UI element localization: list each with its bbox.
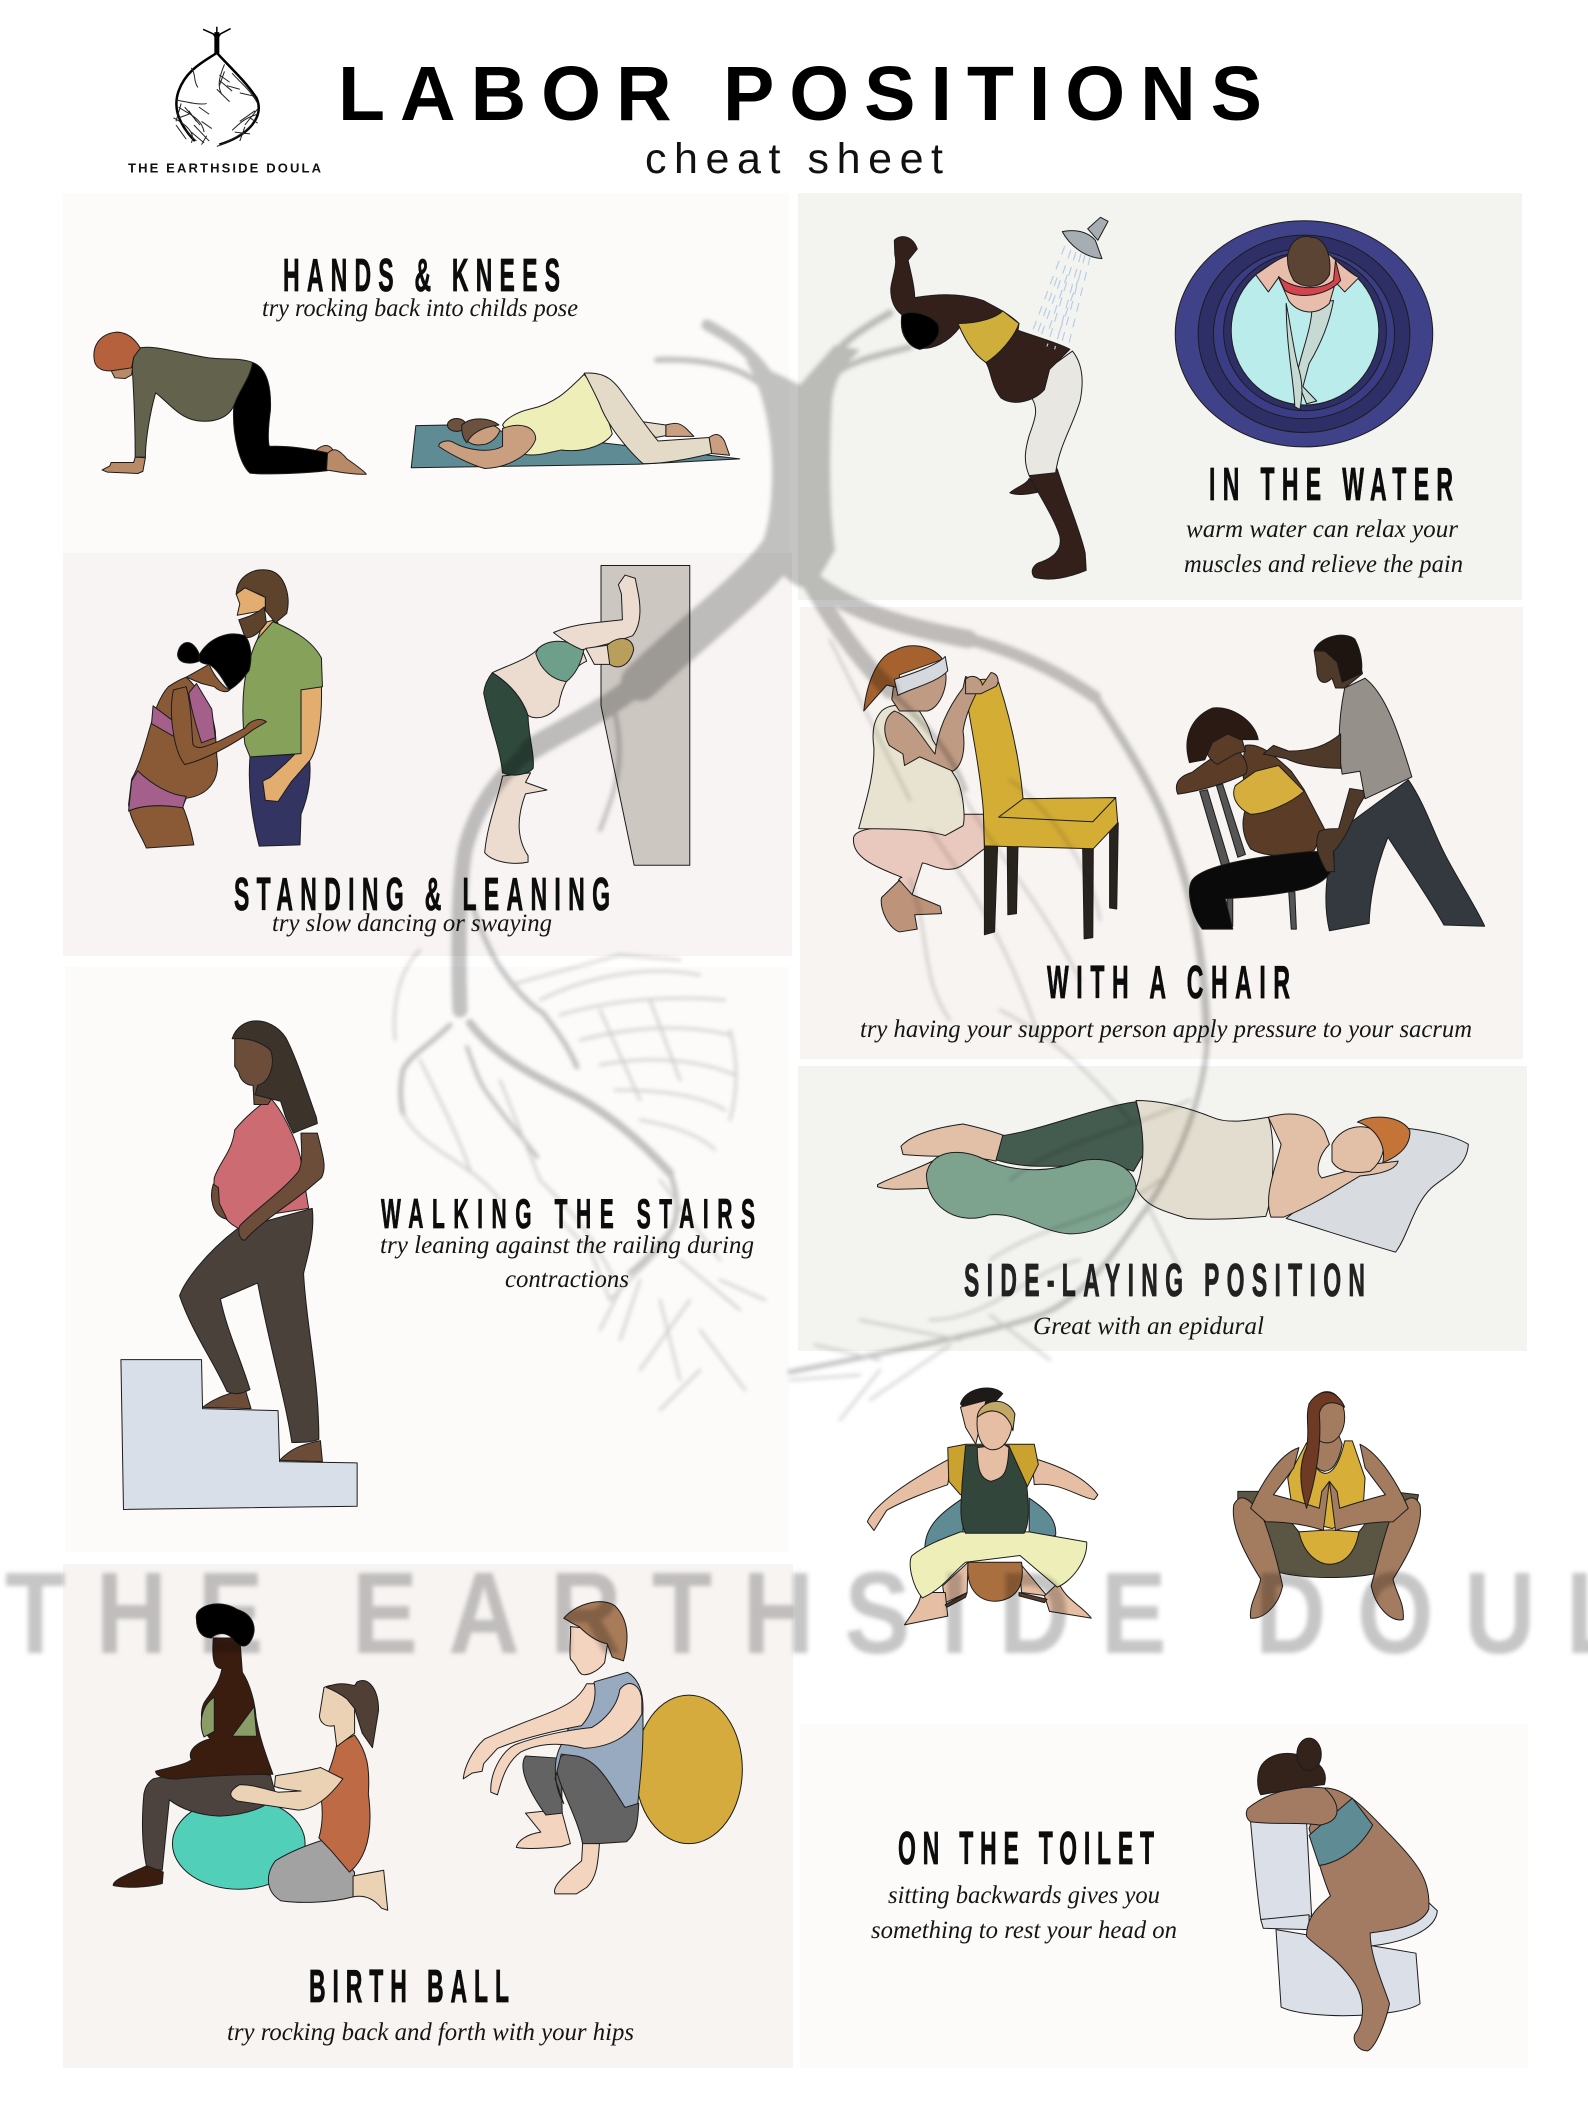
figure: woman on stairs	[121, 1021, 357, 1509]
figure: woman squatting against yellow ball	[463, 1602, 742, 1894]
tip text: Great with an epidural	[1033, 1313, 1264, 1340]
panel background	[63, 193, 789, 553]
heading: WALKING THE STAIRS	[381, 1191, 755, 1238]
figure: squatting woman with palms together	[1233, 1392, 1420, 1620]
figures: squatting positions	[867, 1388, 1420, 1625]
figure: woman under shower	[891, 217, 1108, 579]
heading: ON THE TOILET	[898, 1822, 1154, 1874]
figure: woman sitting backwards on toilet	[1246, 1738, 1437, 2051]
tip text line 2: muscles and relieve the pain	[1184, 551, 1463, 578]
panel background	[800, 1724, 1528, 2068]
tip text line 1: sitting backwards gives you	[888, 1882, 1160, 1909]
panel background	[798, 193, 1522, 600]
panel: hands and knees	[63, 193, 789, 553]
panel background	[63, 553, 792, 956]
panel: on the toilet	[800, 1724, 1528, 2068]
panel background	[65, 967, 789, 1552]
tip text: try having your support person apply pressure to your sacrum	[860, 1016, 1472, 1043]
figure: couple leaning	[129, 570, 322, 848]
tip text line 2: contractions	[505, 1266, 629, 1293]
figure: woman seated on chair with support person	[1176, 635, 1485, 931]
figure: supported squat couple	[867, 1388, 1098, 1625]
panel: in the water	[798, 193, 1522, 600]
figure: woman squatting holding yellow chair	[853, 646, 1118, 939]
heading: BIRTH BALL	[309, 1960, 509, 2012]
figure: birth pool with woman from above	[1175, 221, 1433, 447]
heading: IN THE WATER	[1209, 458, 1453, 510]
figure: woman in childs pose on mat	[411, 373, 740, 469]
logo wordmark: THE EARTHSIDE DOULA	[128, 160, 322, 176]
panel: standing and leaning	[63, 553, 792, 956]
panel: with a chair	[800, 607, 1523, 1059]
tip text: try slow dancing or swaying	[272, 910, 552, 937]
panel: walking the stairs	[65, 967, 789, 1552]
panel background	[798, 1066, 1527, 1351]
panel background	[63, 1564, 793, 2068]
watermark tree trunk	[745, 345, 860, 590]
heading: STANDING & LEANING	[234, 868, 610, 920]
figure: woman on birth ball with support person	[113, 1604, 388, 1910]
tip text line 2: something to rest your head on	[871, 1917, 1177, 1944]
heading: HANDS & KNEES	[283, 249, 560, 301]
tip text: try rocking back into childs pose	[262, 295, 578, 322]
watermark: large tree and wordmark	[5, 313, 1588, 1678]
heading: SIDE-LAYING POSITION	[964, 1254, 1365, 1306]
subtitle: cheat sheet	[645, 135, 943, 183]
heading: WITH A CHAIR	[1047, 956, 1290, 1008]
watermark main branches	[401, 313, 1207, 1372]
header	[128, 27, 1262, 183]
tip text line 1: warm water can relax your	[1186, 516, 1458, 543]
panel: side-laying position	[798, 1066, 1527, 1351]
tip text line 1: try leaning against the railing during	[380, 1232, 754, 1259]
panel background	[800, 607, 1523, 1059]
tip text: try rocking back and forth with your hips	[227, 2019, 634, 2046]
title: LABOR POSITIONS	[338, 51, 1262, 137]
figure: woman on hands and knees	[94, 332, 366, 474]
watermark fine roots	[394, 640, 1190, 1420]
figure: woman leaning on wall	[484, 566, 690, 865]
panel: birth ball	[63, 1564, 793, 2068]
logo: tree in oval	[173, 27, 259, 146]
figure: woman lying on side with pillows	[878, 1100, 1468, 1252]
